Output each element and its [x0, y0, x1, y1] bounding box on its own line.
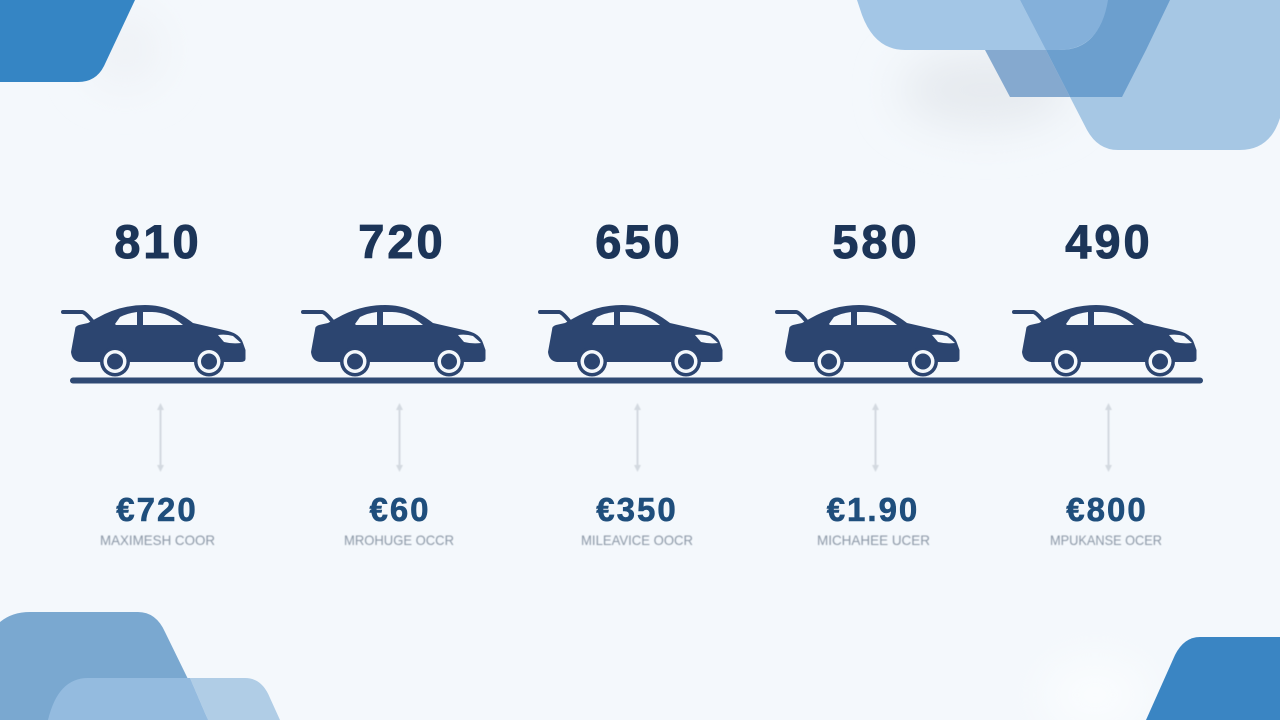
price 3: €350: [596, 491, 678, 528]
decorative shape: bottom right: [1146, 637, 1280, 720]
price 5: €800: [1066, 491, 1148, 528]
decorative shape: top left: [0, 0, 135, 82]
value 810: 810: [114, 215, 202, 268]
price 4: €1.90: [827, 491, 919, 528]
column 2: [303, 215, 486, 548]
soft shadow under top-right shapes: [900, 52, 1070, 128]
value 720: 720: [358, 215, 446, 268]
arrow 4: [872, 403, 879, 472]
value 580: 580: [832, 215, 920, 268]
icon: car 5: [1014, 305, 1196, 376]
value 490: 490: [1065, 215, 1153, 268]
column 1: [63, 215, 246, 548]
soft shadow beside top-left shape: [90, 15, 160, 85]
arrow 1: [157, 403, 164, 472]
caption 3: MILEAVICE OOCR: [581, 532, 693, 548]
icon: car 1: [63, 305, 246, 376]
decorative shapes: top right: [857, 0, 1280, 150]
arrow 3: [634, 403, 641, 472]
icon: car 4: [777, 305, 960, 376]
arrow 5: [1105, 403, 1112, 472]
soft highlight bottom right: [1045, 663, 1145, 720]
caption 5: MPUKANSE OCER: [1050, 532, 1162, 548]
icon: car 3: [540, 305, 722, 376]
icon: car 2: [303, 305, 486, 376]
value 650: 650: [595, 215, 683, 268]
price 2: €60: [369, 491, 431, 528]
timeline line: [70, 378, 1203, 384]
column 5: [1014, 215, 1196, 548]
caption 2: MROHUGE OCCR: [344, 532, 454, 548]
column 4: [777, 215, 960, 548]
arrow 2: [396, 403, 403, 472]
decorative shapes: bottom left: [0, 612, 280, 720]
price 1: €720: [116, 491, 198, 528]
caption 4: MICHAHEE UCER: [817, 532, 930, 548]
column 3: [540, 215, 722, 548]
caption 1: MAXIMESH COOR: [100, 532, 215, 548]
